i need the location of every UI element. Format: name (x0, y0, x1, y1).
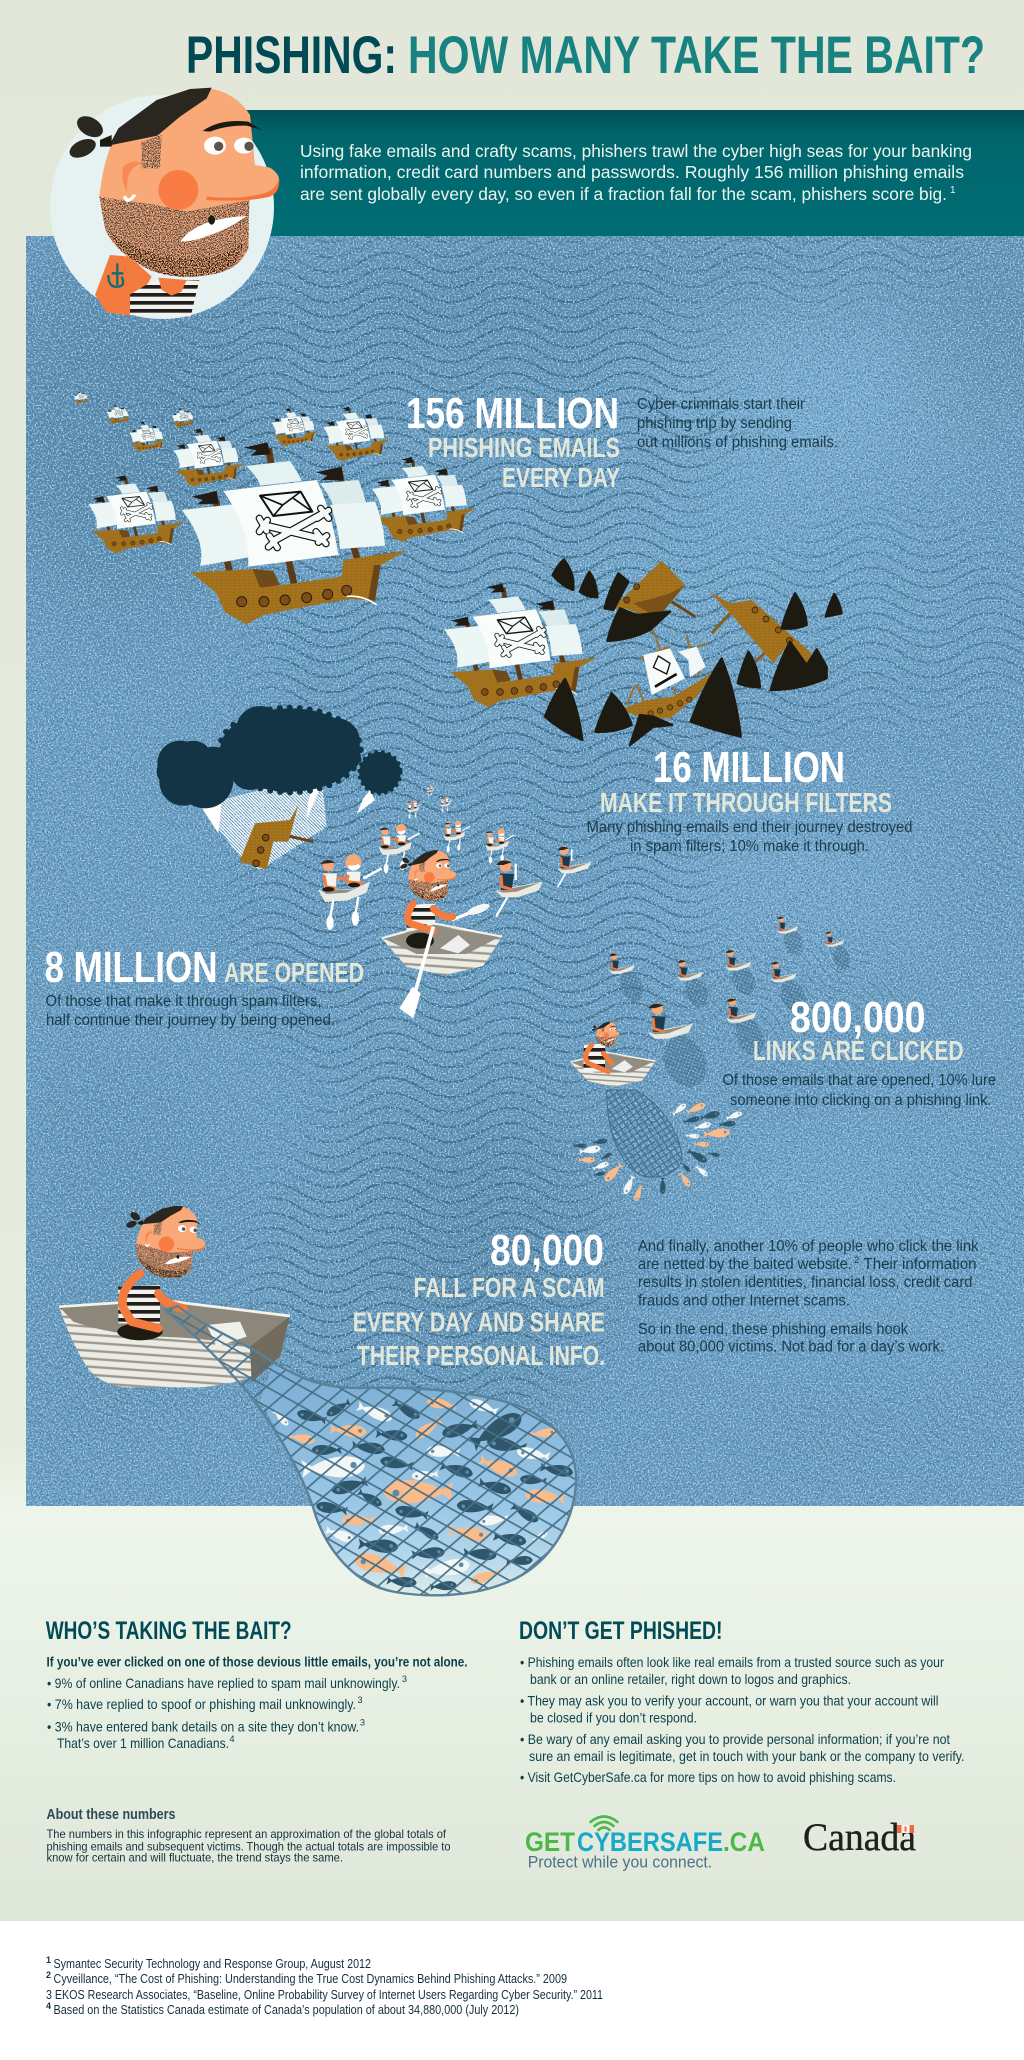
flagship (182, 442, 407, 624)
stat: 80,000 (353, 1226, 605, 1371)
stat: 8 million: half continue their journey by being opened. (46, 1012, 335, 1029)
icon: pirate portrait (50, 88, 279, 319)
text: cyber criminals (637, 396, 838, 451)
panel: who's taking the bait: 3 (360, 1718, 365, 1728)
panel: who's taking the bait: 3 (402, 1674, 407, 1684)
panel: don't get phished: DON’T GET PHISHED! (519, 1617, 722, 1645)
logo: get cyber safe: .CA (723, 1827, 765, 1857)
text: cyber criminals: phishing trip by sending (637, 415, 792, 432)
stat: 16 million: Many phishing emails end their journey destroyed (586, 819, 912, 836)
panel: don't get phished: be closed if you don’t respond. (530, 1710, 697, 1726)
sea background panel (0, 220, 1024, 1506)
wreck: right hull (709, 592, 812, 668)
intro banner: Using fake emails and crafty scams, phishers trawl the cyber high seas for your banking (300, 141, 972, 161)
rowers (485, 829, 514, 863)
distant ship 4 (129, 422, 167, 452)
fisherman (117, 1200, 209, 1340)
fisherman in boat (59, 1200, 290, 1387)
distant ship 3 (172, 408, 195, 427)
text: and finally: about 80,000 victims. Not bad for a day’s work. (638, 1338, 944, 1356)
lone rower (496, 860, 543, 917)
intro banner (230, 110, 1024, 236)
panel: who's taking the bait: If you’ve ever clicked on one of those devious little emails, you’re not alone. (46, 1654, 468, 1670)
stat: 80,000: FALL FOR A SCAM (414, 1272, 604, 1303)
storm clouds (157, 706, 401, 808)
distant rowers (427, 785, 435, 796)
stat: 8 million: ARE OPENED (224, 957, 364, 988)
stat: 8 million: 8 MILLION (44, 943, 218, 992)
logo: get cyber safe: CYBERSAFE (577, 1827, 723, 1857)
small net boats and fish (570, 917, 853, 1202)
boat interior and hull (59, 1300, 290, 1387)
panel: who's taking the bait: • 9% of online Canadians have replied to spam mail unknowingly. (47, 1675, 400, 1691)
text: and finally: 2 (854, 1255, 859, 1265)
intro banner: information, credit card numbers and passwords. Roughly 156 million phishing emails (300, 162, 964, 182)
stat: 80,000: THEIR PERSONAL INFO. (357, 1340, 605, 1371)
rowers pair (318, 854, 382, 930)
footnotes: Cyveillance, “The Cost of Phishing: Understanding the True Cost Dynamics Behind Phishing Attacks.” 2009 (54, 1971, 567, 1986)
distant ship 2 (107, 405, 130, 424)
footer white band (0, 1921, 1024, 2060)
text: and finally: So in the end, these phishing emails hook (638, 1321, 908, 1338)
stat: 16 million: 16 MILLION (653, 743, 845, 792)
text: and finally: Their information (864, 1256, 976, 1273)
panel: don't get phished: bank or an online retailer, right down to logos and graphics. (530, 1671, 851, 1687)
text: about these numbers: About these numbers (46, 1807, 176, 1823)
title (186, 26, 985, 85)
stat: 8 million (44, 943, 364, 1029)
distant ship 1 (74, 392, 89, 404)
ships hitting rocks (spam filter) (444, 559, 842, 745)
ship fleet (74, 392, 477, 624)
fisherman boat (570, 1022, 656, 1087)
ship surviving (444, 584, 597, 707)
text: and finally: results in stolen identities, financial loss, credit card (638, 1274, 972, 1291)
stat: 16 million (586, 743, 912, 855)
net body fill (260, 1363, 576, 1595)
rowers (407, 800, 422, 819)
stat: 800,000: someone into clicking on a phishing link. (730, 1092, 992, 1109)
stat: 16 million: MAKE IT THROUGH FILTERS (600, 787, 892, 818)
stat: 800,000: 800,000 (790, 993, 926, 1042)
caught fish (272, 1396, 574, 1592)
small boats (609, 917, 844, 1039)
wreck in storm (239, 805, 313, 869)
title: PHISHING: (186, 26, 397, 85)
footnotes: 3 EKOS Research Associates, “Baseline, Online Probability Survey of Internet Users Regarding Cyber Security.” 2011 (46, 1987, 603, 2002)
stat: 80,000: EVERY DAY AND SHARE (353, 1306, 605, 1338)
rocks (545, 559, 842, 745)
escaping fish (573, 1101, 743, 1202)
text: about these numbers: phishing emails and subsequent victims. Though the actual totals are impossible to (46, 1840, 451, 1854)
panel: who's taking the bait: • 7% have replied to spoof or phishing mail unknowingly. (47, 1696, 356, 1712)
panel: who's taking the bait (46, 1617, 467, 1751)
near ship left (88, 475, 185, 554)
rowers (378, 824, 420, 873)
text: about these numbers: The numbers in this infographic represent an approximation of the global totals of (46, 1827, 447, 1841)
lone rower small (557, 846, 591, 887)
main rower (382, 850, 502, 1018)
text: and finally: frauds and other Internet scams. (638, 1292, 850, 1310)
text: and finally: are netted by the baited website. (638, 1256, 852, 1273)
text: about these numbers (46, 1807, 451, 1864)
icon: flag (897, 1825, 914, 1833)
panel: don't get phished: • Be wary of any email asking you to provide personal information; if you’re not (520, 1731, 950, 1747)
panel: who's taking the bait: 4 (230, 1734, 235, 1744)
logo: get cyber safe: GET (525, 1827, 575, 1857)
net mesh (165, 1306, 576, 1595)
panel: don't get phished: • Phishing emails often look like real emails from a trusted source such as your (520, 1654, 944, 1670)
logo: get cyber safe (525, 1816, 765, 1872)
rain and lightning (200, 775, 375, 870)
panel: who's taking the bait: WHO’S TAKING THE BAIT? (46, 1617, 292, 1645)
stat: 8 million: Of those that make it through spam filters, (46, 993, 322, 1010)
text: cyber criminals: Cyber criminals start their (637, 396, 805, 413)
panel: don't get phished: • Visit GetCyberSafe.ca for more tips on how to avoid phishing scams. (520, 1769, 896, 1785)
small nets (616, 927, 853, 1094)
footnotes (46, 1955, 603, 2017)
footnotes: 1 (46, 1955, 51, 1965)
rowers (443, 820, 470, 852)
wreck: upper hull (611, 561, 695, 617)
main small net (607, 1090, 682, 1177)
stat: 800,000: Of those emails that are opened, 10% lure (722, 1072, 996, 1089)
stat: 156 million: 156 MILLION (406, 389, 619, 438)
text: about these numbers: know for certain and will fluctuate, the trend stays the same. (46, 1850, 343, 1864)
text: and finally (638, 1238, 979, 1356)
stat: 16 million: in spam filters; 10% make it through. (630, 838, 869, 855)
logo: get cyber safe: Protect while you connect. (528, 1852, 712, 1872)
big net with fish (165, 1306, 576, 1595)
panel: who's taking the bait: • 3% have entered bank details on a site they don’t know. (47, 1718, 359, 1734)
panel: don't get phished (519, 1617, 964, 1785)
wreck: torn ship (620, 630, 717, 718)
intro banner: 1 (950, 185, 956, 196)
text: and finally: And finally, another 10% of people who click the link (638, 1238, 979, 1255)
footnotes: 2 (46, 1970, 51, 1980)
near ship right (372, 457, 477, 542)
stat: 156 million (406, 389, 620, 493)
intro banner: are sent globally every day, so even if a fraction fall for the scam, phishers score big. (300, 184, 947, 204)
footnotes: Based on the Statistics Canada estimate of Canada’s population of about 34,880,000 (July 2012) (54, 2002, 519, 2017)
stat: 156 million: PHISHING EMAILS (428, 432, 620, 463)
logo: Canada wordmark: Canada (803, 1816, 916, 1859)
stat: 800,000 (722, 993, 996, 1109)
mid ship 5 (272, 408, 319, 447)
stat: 156 million: EVERY DAY (502, 462, 620, 493)
panel: who's taking the bait: That’s over 1 million Canadians. (57, 1735, 229, 1751)
mid ship 6 (323, 407, 391, 461)
text: cyber criminals: out millions of phishing emails. (637, 434, 838, 451)
icon: wifi arcs (590, 1816, 618, 1830)
panel: who's taking the bait: 3 (358, 1695, 363, 1705)
mid ship 7 (173, 429, 245, 487)
panel: don't get phished: sure an email is legitimate, get in touch with your bank or the company to verify. (529, 1748, 964, 1764)
footnotes: Symantec Security Technology and Response Group, August 2012 (54, 1956, 371, 1971)
stat: 80,000: 80,000 (490, 1226, 604, 1275)
storm and rowers scene (157, 706, 591, 1018)
rowers (440, 797, 453, 812)
panel: don't get phished: • They may ask you to verify your account, or warn you that your account will (520, 1692, 938, 1708)
footnotes: 4 (46, 2001, 51, 2011)
